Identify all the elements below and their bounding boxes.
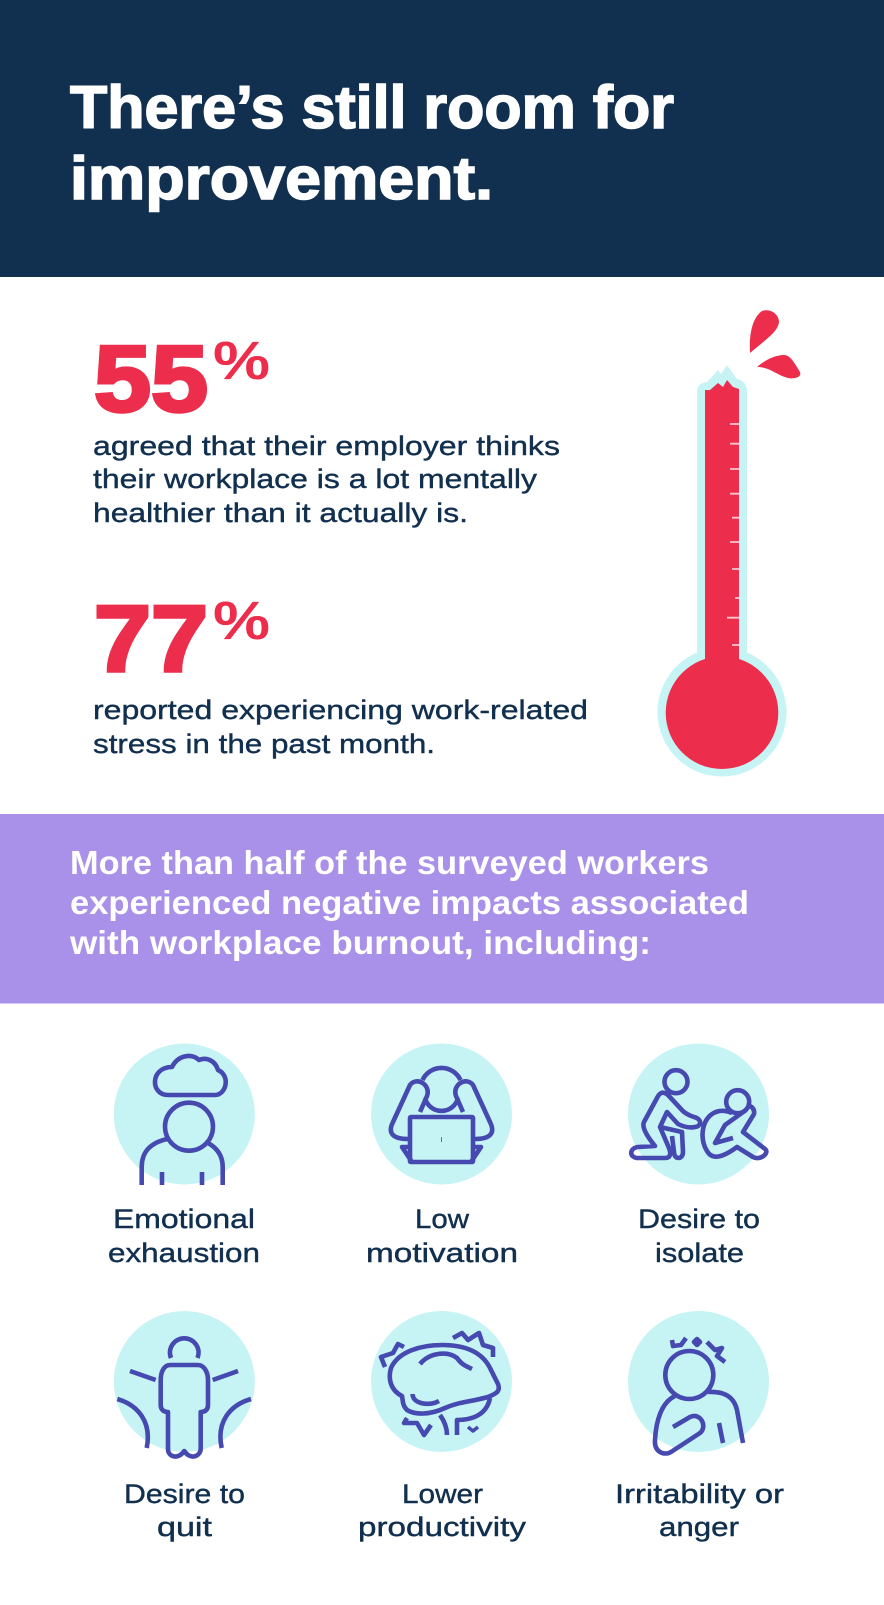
item: lower productivity: Lower [402,1479,483,1509]
item: emotional exhaustion: Emotional [113,1204,255,1234]
item: low motivation [366,1044,518,1268]
statistic: 77%: stress in the past month. [93,729,435,759]
purple band heading [0,814,884,1004]
item: lower productivity [358,1311,527,1542]
header banner with title: There’s still room for [70,74,674,141]
item: desire to isolate [628,1044,769,1268]
statistic: 77% [93,586,588,759]
item: low motivation: motivation [366,1238,518,1268]
statistic: 55%: 55 [94,326,208,431]
item: desire to isolate: isolate [655,1238,744,1268]
item: desire to quit: quit [157,1512,213,1542]
item: desire to quit [114,1311,255,1542]
statistic: 55% [93,326,560,528]
statistic: 55%: % [213,331,270,391]
purple band heading: with workplace burnout, including: [69,925,651,962]
item: irritability or anger: Irritability or [615,1479,784,1509]
statistic: 55%: their workplace is a lot mentally [93,464,538,494]
statistic: 77%: 77 [94,586,208,691]
purple band heading: More than half of the surveyed workers [70,845,709,882]
statistic: 77%: % [213,591,270,651]
item: irritability or anger: anger [659,1512,739,1542]
icon: broken thermometer [658,310,800,776]
item: lower productivity: productivity [358,1512,527,1542]
item: emotional exhaustion: exhaustion [108,1238,260,1268]
item: desire to isolate: Desire to [638,1204,760,1234]
statistic: 77%: reported experiencing work-related [93,695,588,725]
item: emotional exhaustion [108,1044,260,1268]
statistic: 55%: agreed that their employer thinks [93,431,560,461]
header banner with title [0,0,884,277]
purple band heading: experienced negative impacts associated [70,885,749,922]
item: low motivation: Low [415,1204,470,1234]
header banner with title: improvement. [70,145,493,212]
statistic: 55%: healthier than it actually is. [93,498,468,528]
item: irritability or anger [615,1311,784,1542]
item: desire to quit: Desire to [124,1479,245,1509]
